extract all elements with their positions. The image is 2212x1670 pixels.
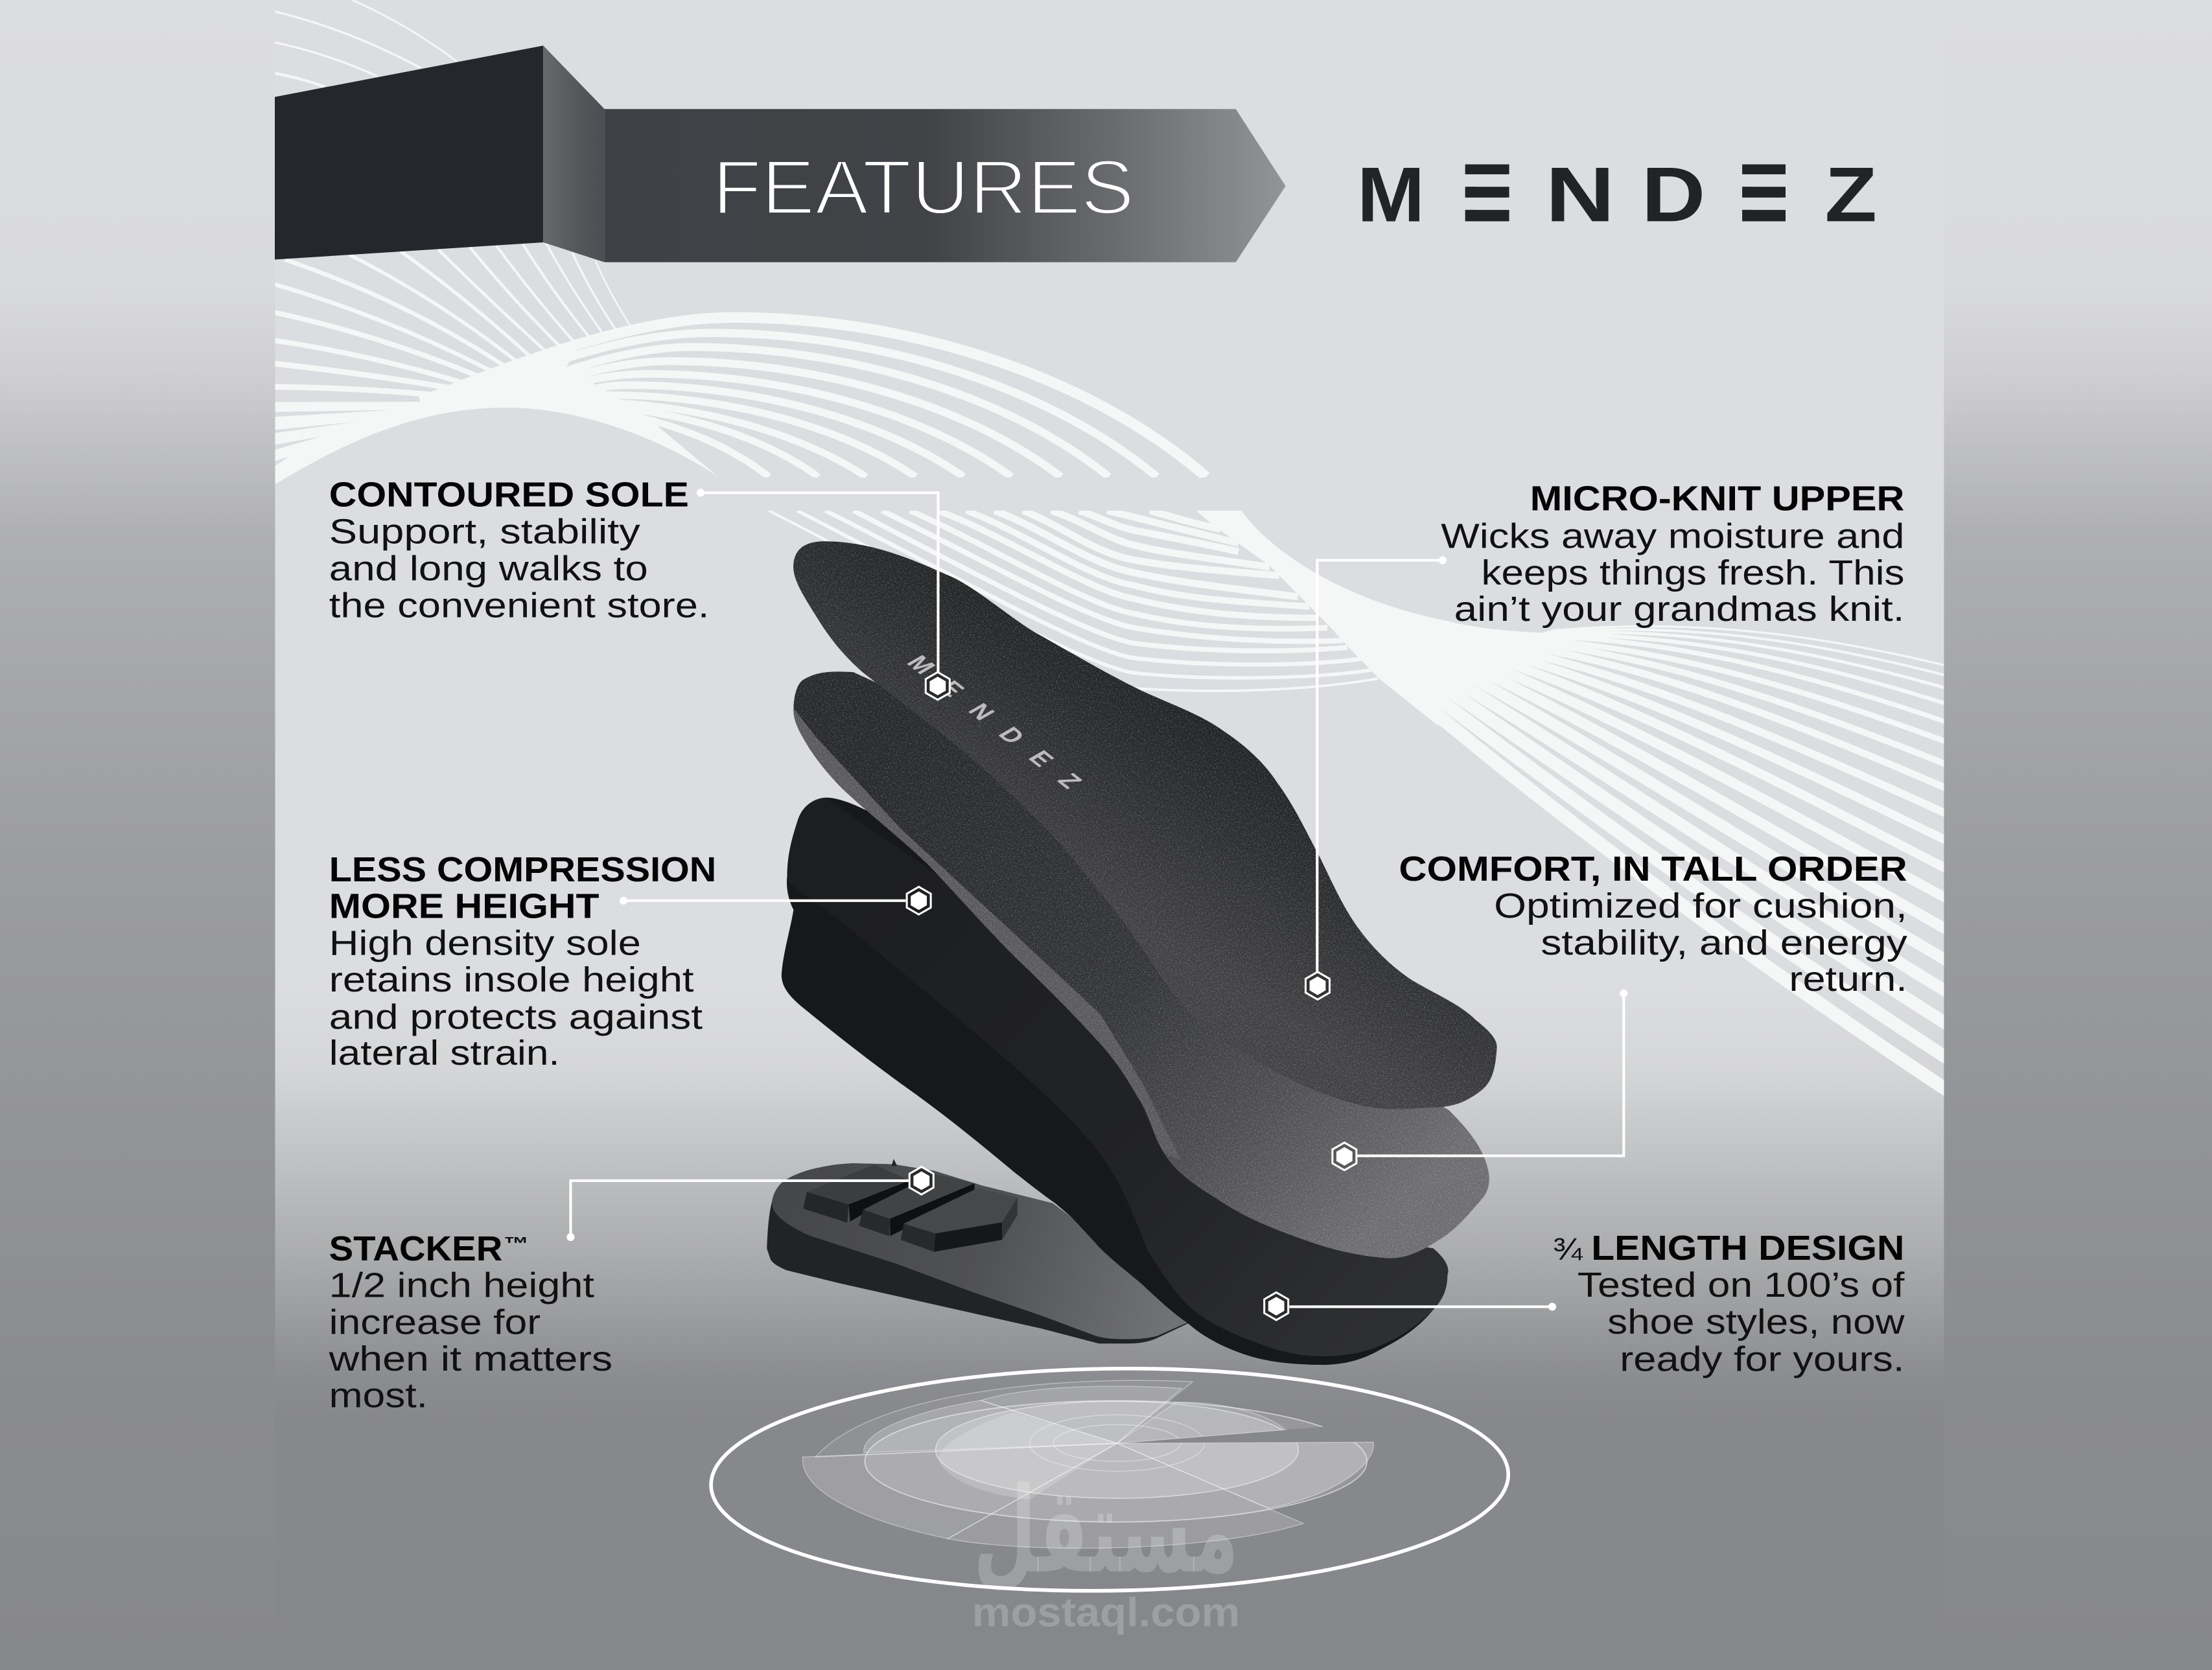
connector: micro-knit bbox=[1317, 557, 1447, 973]
text block: length design: Tested on 100’s of bbox=[1578, 1266, 1905, 1305]
text block: less compression: LESS COMPRESSION bbox=[329, 851, 716, 889]
marker: less compression bbox=[907, 887, 931, 914]
text block: stacker: most. bbox=[329, 1377, 428, 1415]
right wave: thin fan bbox=[769, 511, 1379, 691]
block 2 bbox=[859, 1174, 975, 1236]
text block: length design bbox=[1553, 1229, 1905, 1379]
connector: stacker bbox=[566, 1181, 909, 1241]
title: FEATURES bbox=[712, 145, 1134, 231]
top insole layer bbox=[793, 541, 1497, 1109]
text block: less compression: MORE HEIGHT bbox=[329, 888, 600, 926]
marker: comfort bbox=[1333, 1142, 1356, 1170]
text block: comfort: return. bbox=[1789, 960, 1907, 999]
foam rim bbox=[793, 708, 1181, 1159]
text block: less compression: lateral strain. bbox=[329, 1034, 560, 1073]
text block: comfort: stability, and energy bbox=[1541, 924, 1907, 962]
connector: contoured sole bbox=[697, 489, 938, 674]
connector: length bbox=[1289, 1303, 1556, 1311]
wave pattern: upper left bbox=[275, 0, 1206, 484]
logo: MENDEZ wordmark: E bbox=[1460, 152, 1512, 238]
text block: stacker: when it matters bbox=[328, 1340, 612, 1378]
text block: less compression bbox=[329, 851, 716, 1073]
connector: comfort bbox=[1357, 990, 1627, 1156]
text block: micro-knit upper: keeps things fresh. This bbox=[1481, 554, 1904, 592]
text block: stacker: STACKER bbox=[329, 1230, 502, 1268]
block 1 bbox=[803, 1165, 911, 1223]
watermark: مستقل bbox=[973, 1462, 1239, 1600]
foam insole layer bbox=[793, 671, 1489, 1258]
logo: MENDEZ wordmark: E bbox=[1736, 152, 1788, 238]
banner: fold bbox=[543, 45, 605, 262]
text block: micro-knit upper bbox=[1441, 480, 1904, 629]
text block: length design: LENGTH DESIGN bbox=[1591, 1229, 1904, 1268]
right wave: wide fan bbox=[1552, 626, 1947, 666]
background: centre panel bbox=[275, 0, 1944, 1670]
marker: contoured sole bbox=[926, 672, 949, 700]
text block: micro-knit upper: Wicks away moisture and bbox=[1441, 517, 1904, 555]
connector: less compression bbox=[620, 897, 905, 905]
text block: length design: ready for yours. bbox=[1620, 1341, 1904, 1379]
text block: contoured sole bbox=[329, 476, 709, 625]
text block: micro-knit upper: ain’t your grandmas knit. bbox=[1454, 590, 1904, 629]
marker: micro-knit bbox=[1305, 972, 1330, 999]
block 3 bbox=[901, 1188, 1018, 1252]
marker: length bbox=[1264, 1292, 1288, 1320]
text block: stacker: ™ bbox=[504, 1233, 529, 1254]
wedge top face bbox=[789, 798, 1448, 1356]
text block: contoured sole: the convenient store. bbox=[329, 587, 709, 625]
marker: stacker bbox=[909, 1167, 933, 1194]
text block: comfort: COMFORT, IN TALL ORDER bbox=[1399, 850, 1907, 888]
text block: micro-knit upper: MICRO-KNIT UPPER bbox=[1530, 480, 1904, 518]
watermark bbox=[972, 1462, 1240, 1636]
logo: MENDEZ wordmark: N bbox=[1546, 152, 1615, 238]
platform ring bbox=[710, 1363, 1510, 1596]
text block: stacker: increase for bbox=[329, 1303, 541, 1341]
text block: length design: ¾ bbox=[1553, 1233, 1583, 1267]
logo: MENDEZ wordmark: M bbox=[1357, 152, 1425, 238]
text block: contoured sole: and long walks to bbox=[329, 550, 648, 588]
right wave: solid swoop bbox=[1196, 511, 1629, 726]
text block: less compression: and protects against bbox=[329, 998, 703, 1036]
stacker top face bbox=[772, 1163, 1189, 1339]
logo: MENDEZ wordmark: Z bbox=[1825, 152, 1877, 238]
text block: stacker: 1/2 inch height bbox=[329, 1267, 594, 1305]
radial sectors bbox=[802, 1380, 1373, 1548]
banner: features arrow with title bbox=[605, 109, 1286, 262]
upper left wave: solid crossing bbox=[275, 345, 718, 484]
logo: MENDEZ wordmark: D bbox=[1642, 152, 1705, 238]
stacker body bbox=[767, 1163, 1189, 1343]
text block: stacker bbox=[328, 1230, 612, 1415]
text block: less compression: High density sole bbox=[329, 925, 641, 963]
text block: comfort bbox=[1399, 850, 1907, 999]
text block: less compression: retains insole height bbox=[329, 961, 694, 999]
spikes bbox=[825, 1159, 897, 1191]
wave pattern: right bbox=[769, 511, 1950, 1092]
text block: comfort: Optimized for cushion, bbox=[1494, 887, 1907, 925]
banner: dark block bbox=[275, 45, 543, 260]
text block: contoured sole: Support, stability bbox=[329, 513, 640, 551]
text block: length design: shoe styles, now bbox=[1607, 1303, 1905, 1341]
logo: MENDEZ wordmark bbox=[1362, 165, 1874, 222]
bottom platform: ellipse and radial sectors bbox=[710, 1363, 1510, 1596]
stacker insert bbox=[767, 1159, 1189, 1343]
watermark: mostaql.com bbox=[972, 1590, 1240, 1636]
text block: contoured sole: CONTOURED SOLE bbox=[329, 476, 689, 515]
insole brand mark: MENDEZ bbox=[900, 651, 1088, 793]
upper left wave: arches bbox=[421, 318, 1206, 477]
heel wedge layer bbox=[782, 798, 1448, 1365]
